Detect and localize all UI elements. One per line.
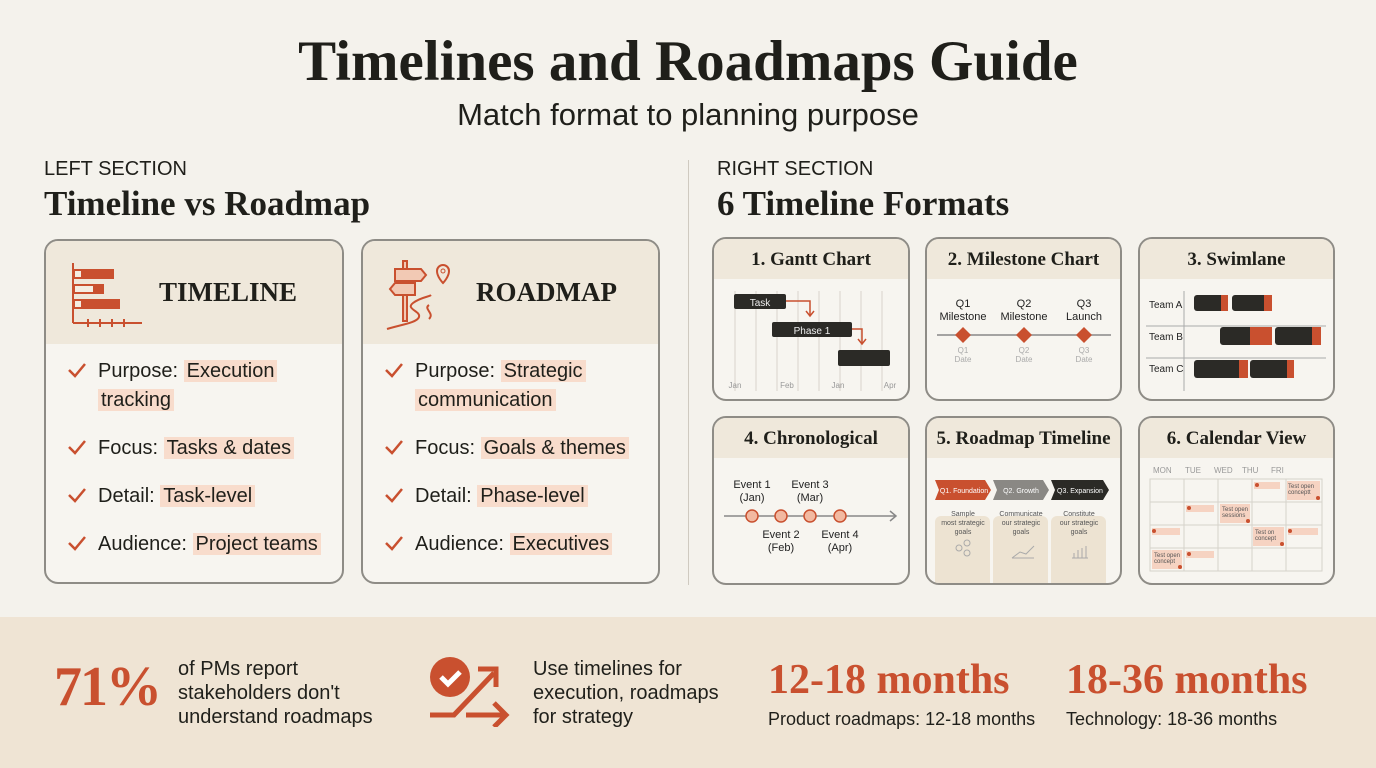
left section label: LEFT SECTION — [44, 158, 187, 180]
milestone graphic: Q2 — [1019, 346, 1030, 355]
panel: calendar view: 6. Calendar View — [1167, 428, 1306, 449]
stat text — [178, 658, 373, 728]
roadmap timeline graphic — [935, 480, 1109, 583]
stat: technology — [1066, 657, 1308, 729]
panel: roadmap — [361, 239, 660, 584]
calendar graphic: Test open — [1222, 507, 1248, 513]
panel: roadmap timeline — [925, 416, 1122, 585]
chronological graphic: (Jan) — [739, 492, 765, 504]
item: purpose: Purpose: Strategic — [415, 360, 583, 382]
icon: check with arrows — [430, 657, 510, 727]
item: purpose — [68, 360, 277, 411]
chronological graphic: Event 2 — [762, 529, 800, 541]
gantt chart graphic: Phase 1 — [794, 326, 831, 337]
calendar graphic: THU — [1242, 466, 1259, 475]
gantt chart graphic: Apr — [884, 381, 897, 390]
milestone graphic: Milestone — [939, 311, 987, 323]
calendar graphic: conceptt — [1288, 490, 1311, 496]
item: purpose: tracking — [101, 389, 171, 411]
tip text: for strategy — [533, 706, 633, 728]
panel: chronological: 4. Chronological — [744, 428, 878, 449]
stat text: of PMs report — [178, 658, 298, 680]
milestone graphic: Milestone — [1000, 311, 1048, 323]
chronological graphic: Event 1 — [733, 479, 771, 491]
swimlane graphic: Team C — [1149, 364, 1183, 375]
roadmap timeline graphic: goals — [955, 529, 972, 536]
roadmap timeline graphic: Q1. Foundation — [940, 488, 988, 495]
panel: calendar view — [1138, 416, 1335, 585]
panel: roadmap timeline: 5. Roadmap Timeline — [936, 428, 1110, 449]
gantt chart graphic — [728, 291, 897, 391]
stat: product roadmaps: 12-18 months — [768, 657, 1010, 703]
timeline label: TIMELINE — [159, 277, 297, 307]
milestone graphic: Q3 — [1077, 298, 1091, 310]
tip text — [533, 658, 719, 728]
panel: swimlane: 3. Swimlane — [1187, 249, 1286, 270]
swimlane graphic: Team A — [1149, 300, 1183, 311]
item: purpose — [385, 360, 586, 411]
stat: product roadmaps — [768, 657, 1035, 729]
calendar graphic: Test on — [1255, 530, 1274, 536]
stat: technology: Technology: 18-36 months — [1066, 709, 1277, 729]
item: audience: Audience: Executives — [415, 533, 609, 555]
item: purpose: communication — [418, 389, 553, 411]
title: Timelines and Roadmaps Guide — [298, 30, 1078, 93]
chronological graphic: (Feb) — [768, 542, 794, 554]
chronological graphic: (Mar) — [797, 492, 823, 504]
item: detail: Detail: Task-level — [98, 485, 252, 507]
stat text: stakeholders don't — [178, 682, 340, 704]
calendar graphic — [1150, 466, 1322, 572]
calendar graphic: concept — [1255, 536, 1276, 542]
roadmap timeline graphic: our strategic — [1002, 520, 1041, 527]
left heading: Timeline vs Roadmap — [44, 184, 370, 223]
timeline header — [46, 241, 342, 344]
roadmap timeline graphic: Sample — [951, 511, 975, 518]
milestone graphic — [937, 298, 1111, 364]
chronological graphic: Event 4 — [821, 529, 859, 541]
panel: milestone chart — [925, 237, 1122, 401]
roadmap timeline graphic: our strategic — [1060, 520, 1099, 527]
chronological graphic — [724, 479, 897, 554]
stat: product roadmaps: Product roadmaps: 12-18 months — [768, 709, 1035, 729]
item: focus: Focus: Tasks & dates — [98, 437, 291, 459]
panel: chronological — [712, 416, 910, 585]
right heading: 6 Timeline Formats — [717, 184, 1009, 223]
roadmap header — [363, 241, 658, 344]
calendar graphic: Test open — [1288, 484, 1314, 490]
icon: gantt bars — [72, 263, 142, 327]
gantt chart graphic: Feb — [780, 381, 794, 390]
stat: technology: 18-36 months — [1066, 657, 1308, 703]
milestone graphic: Q3 — [1079, 346, 1090, 355]
roadmap timeline graphic: Q2. Growth — [1003, 488, 1039, 495]
milestone graphic: Date — [1016, 355, 1033, 364]
roadmap timeline graphic: most strategic — [941, 520, 985, 527]
chronological graphic: (Apr) — [828, 542, 852, 554]
calendar graphic: sessions — [1222, 513, 1245, 519]
calendar graphic: concept — [1154, 559, 1175, 565]
subtitle: Match format to planning purpose — [457, 97, 919, 132]
milestone graphic: Q2 — [1017, 298, 1031, 310]
milestone graphic: Launch — [1066, 311, 1102, 323]
item: detail: Detail: Phase-level — [415, 485, 585, 507]
right section label: RIGHT SECTION — [717, 158, 873, 180]
milestone graphic: Date — [1076, 355, 1093, 364]
item: focus: Focus: Goals & themes — [415, 437, 626, 459]
milestone graphic: Date — [955, 355, 972, 364]
gantt chart graphic: Jan — [729, 381, 741, 390]
roadmap label: ROADMAP — [476, 277, 617, 307]
panel: milestone chart: 2. Milestone Chart — [948, 249, 1099, 270]
chronological graphic: Event 3 — [791, 479, 829, 491]
roadmap timeline graphic: Constitute — [1063, 511, 1095, 518]
stat text: understand roadmaps — [178, 706, 373, 728]
gantt chart graphic: Task — [750, 298, 771, 309]
stat: 71%: 71% — [54, 656, 160, 718]
calendar graphic: Test open — [1154, 553, 1180, 559]
tip text: Use timelines for — [533, 658, 682, 680]
calendar graphic: MON — [1153, 466, 1172, 475]
panel: timeline — [44, 239, 344, 584]
roadmap timeline graphic: Communicate — [999, 511, 1043, 518]
item: audience: Audience: Project teams — [98, 533, 318, 555]
icon: signpost — [386, 260, 450, 330]
roadmap timeline graphic: Q3. Expansion — [1057, 488, 1103, 495]
roadmap timeline graphic: goals — [1071, 529, 1088, 536]
calendar graphic: WED — [1214, 466, 1233, 475]
roadmap timeline graphic: goals — [1013, 529, 1030, 536]
swimlane graphic: Team B — [1149, 332, 1183, 343]
gantt chart graphic: Jan — [832, 381, 844, 390]
milestone graphic: Q1 — [956, 298, 970, 310]
panel: gantt chart: 1. Gantt Chart — [751, 249, 871, 270]
tip text: execution, roadmaps — [533, 682, 719, 704]
calendar graphic: FRI — [1271, 466, 1284, 475]
calendar graphic: TUE — [1185, 466, 1201, 475]
item: purpose: Purpose: Execution — [98, 360, 274, 382]
panel: gantt chart — [712, 237, 910, 401]
panel: swimlane — [1138, 237, 1335, 401]
milestone graphic: Q1 — [958, 346, 969, 355]
swimlane graphic — [1146, 291, 1326, 391]
bottom band — [0, 617, 1376, 768]
